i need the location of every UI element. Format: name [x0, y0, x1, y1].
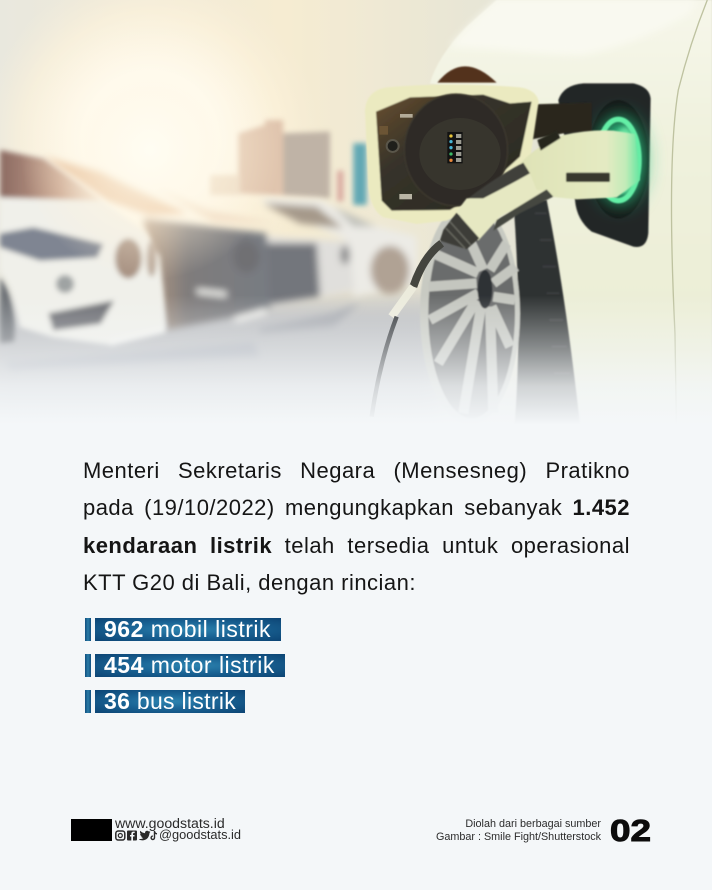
intro paragraph: KTT G20 di Bali, dengan rincian: — [83, 570, 416, 595]
footer website and social handle — [115, 815, 241, 842]
sky and sun glare — [0, 0, 712, 445]
list item: 36 bus listrik: 36 bus listrik — [104, 688, 236, 714]
page number: 02 — [610, 813, 651, 848]
footer website and social handle: www.goodstats.id — [115, 815, 225, 831]
source credit: Diolah dari berbagai sumber — [465, 818, 601, 830]
charging cable — [372, 243, 442, 417]
footer logo block — [71, 819, 112, 841]
fuel flap with panel and status lights — [365, 84, 539, 224]
white car body — [430, 0, 712, 440]
social icons — [115, 830, 158, 841]
footer website and social handle: @goodstats.id — [159, 827, 241, 842]
source credit: Gambar : Smile Fight/Shutterstock — [436, 830, 601, 842]
intro paragraph: kendaraan listrik telah tersedia untuk operasional — [83, 533, 630, 558]
wheel and tyre — [420, 200, 582, 440]
blurred row of parked cars — [0, 150, 447, 427]
intro paragraph: Menteri Sekretaris Negara (Mensesneg) Pratikno — [83, 458, 630, 483]
source credit — [436, 818, 601, 842]
charge port hinge arm — [510, 103, 592, 142]
bottom fade into page background — [0, 295, 712, 425]
charging plug handle — [440, 130, 640, 249]
blurred buildings — [210, 120, 367, 205]
list item: 962 mobil listrik: 962 mobil listrik — [104, 616, 271, 642]
hero photo: electric car charging with parked cars behind — [0, 0, 712, 416]
intro paragraph: pada (19/10/2022) mengungkapkan sebanyak 1.452 — [83, 495, 630, 520]
intro paragraph — [83, 458, 630, 595]
sun glare washing over cars — [0, 20, 300, 280]
list item: 454 motor listrik: 454 motor listrik — [104, 652, 275, 678]
open charge port socket — [558, 83, 651, 247]
tarmac — [0, 300, 447, 427]
